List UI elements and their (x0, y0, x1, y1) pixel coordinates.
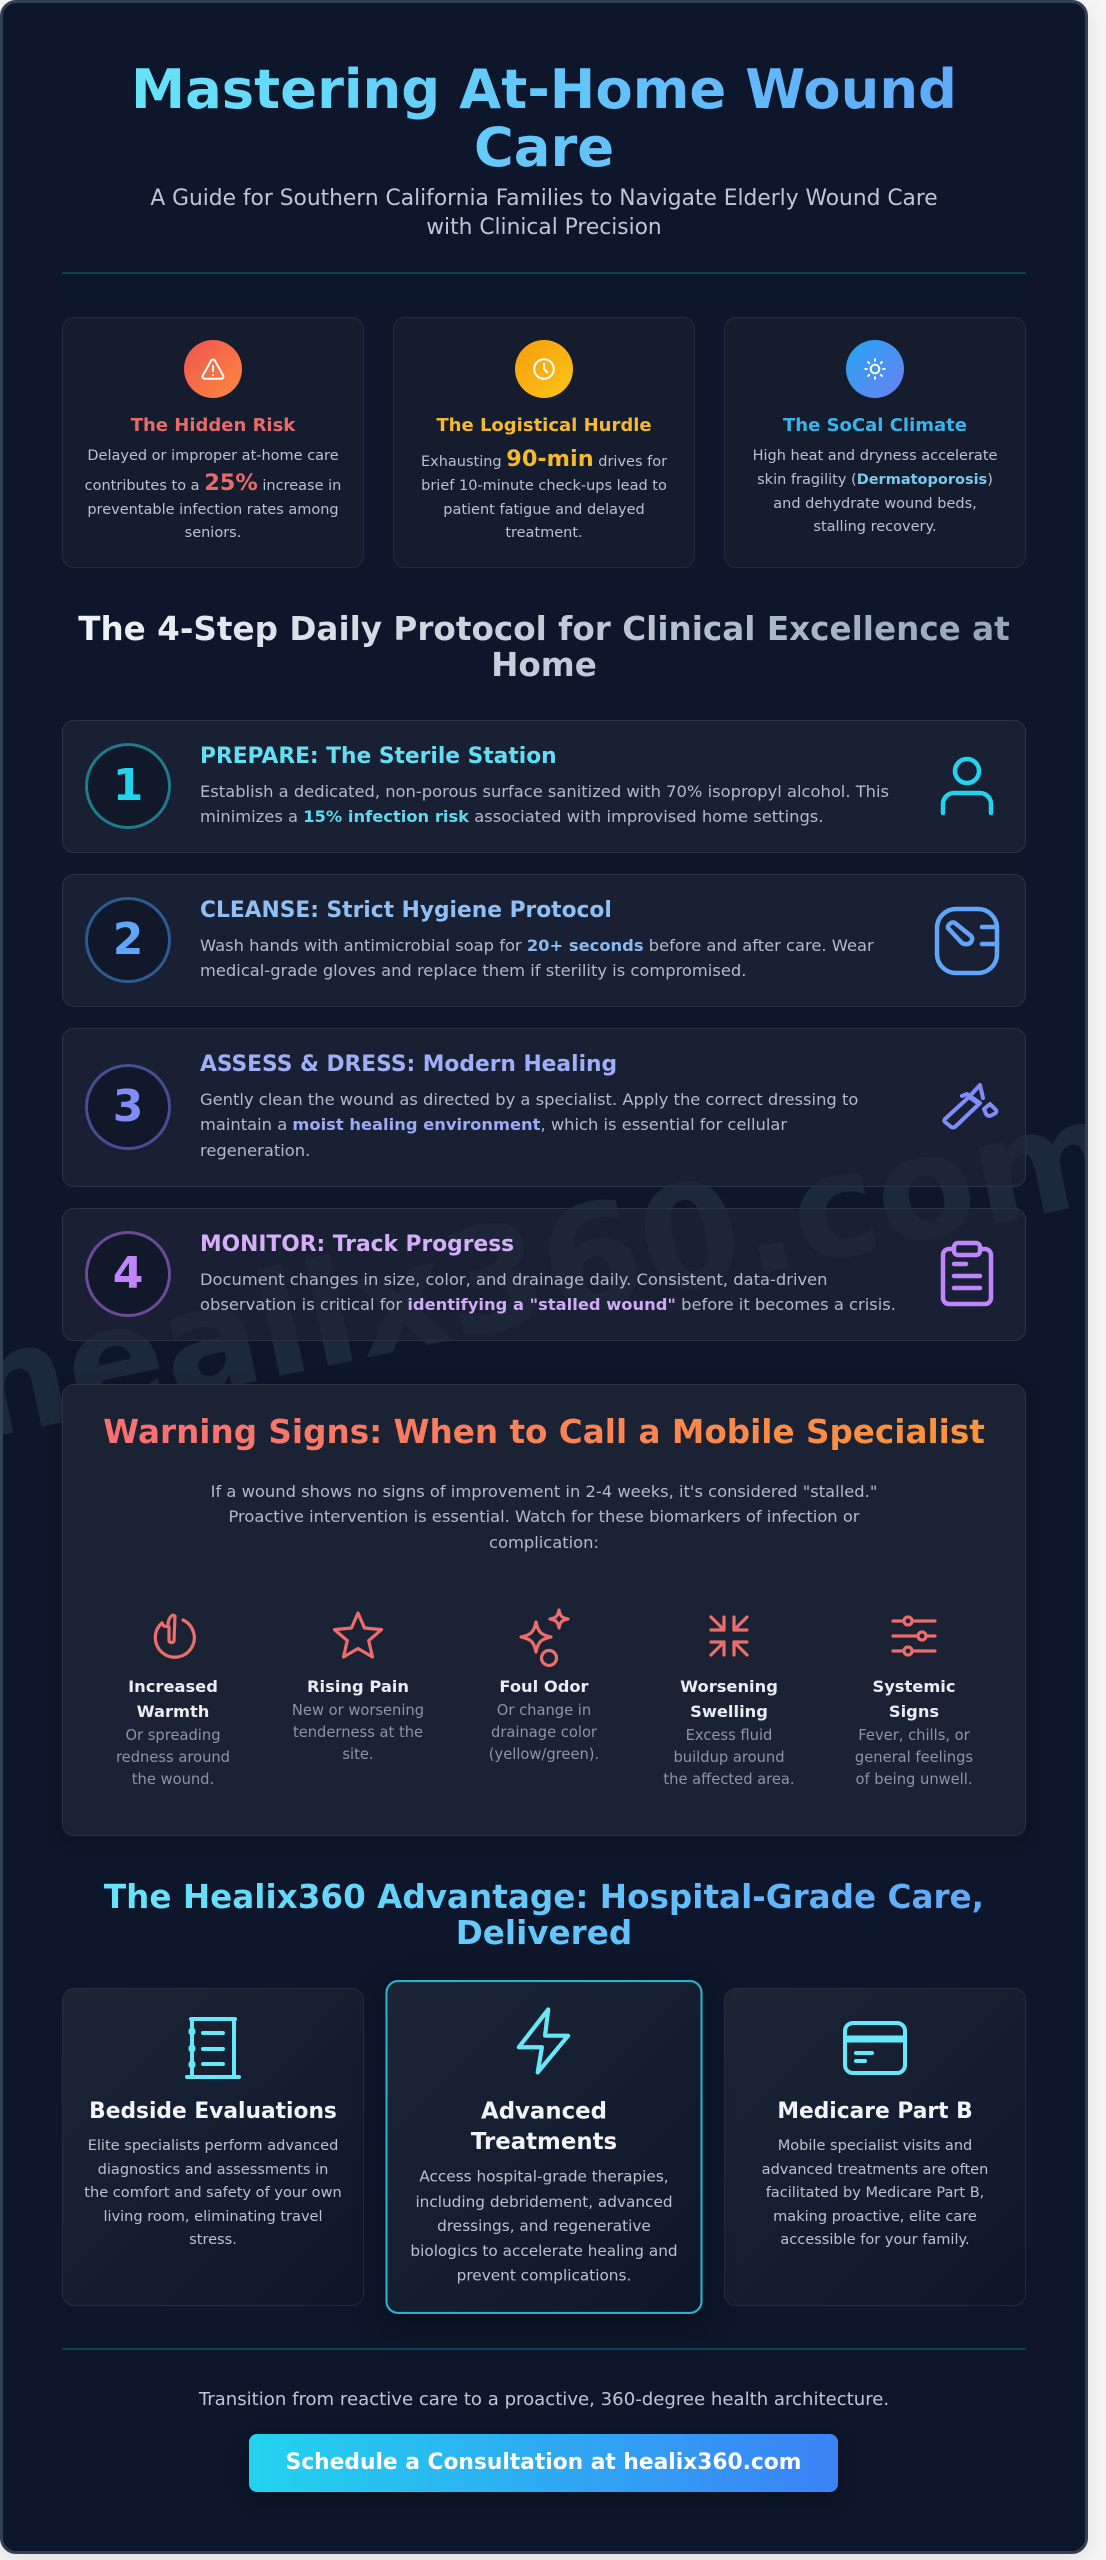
card text (84, 2137, 342, 2248)
subtitle: with Clinical Precision (426, 215, 662, 240)
panel: the hidden risk (62, 317, 364, 568)
icon: power flame (154, 1613, 196, 1659)
section heading: protocol (62, 611, 1026, 683)
card text: Elite specialists perform advanced (88, 2137, 338, 2154)
card text: living room, eliminating travel (103, 2208, 323, 2225)
step 3 text: Gently clean the wound as directed by a specialist. Apply the correct dressing to (200, 1090, 858, 1109)
sign description: Or spreading (125, 1727, 221, 1744)
footer divider (62, 2348, 1026, 2350)
step 1 text: Establish a dedicated, non-porous surface sanitized with 70% isopropyl alcohol. This (200, 782, 889, 801)
sign description (663, 1727, 795, 1788)
step 1 text: minimizes a 15% infection risk associated with improvised home settings. (200, 807, 824, 826)
sign title: Increased (128, 1677, 218, 1696)
card heading: Treatments (471, 2129, 617, 2155)
sign description: Or change in (497, 1702, 591, 1719)
step 3 number: 3 (113, 1081, 143, 1132)
sign description: New or worsening (292, 1702, 424, 1719)
panel: step 4 (62, 1208, 1026, 1341)
sign description: Fever, chills, or (858, 1727, 970, 1744)
step 2 number: 2 (113, 914, 143, 965)
title (62, 61, 1026, 176)
icon: sparkles (519, 1608, 570, 1668)
card text (725, 2134, 1025, 2252)
warning intro text: Proactive intervention is essential. Watch for these biomarkers of infection or (228, 1507, 860, 1526)
card text: biologics to accelerate healing and (410, 2242, 678, 2260)
sign description: the affected area. (663, 1771, 795, 1788)
card text: Exhausting 90-min drives for (421, 446, 667, 472)
sign description: general feelings (855, 1749, 973, 1766)
step 3 text: maintain a moist healing environment, which is essential for cellular (200, 1115, 787, 1134)
card heading: The Hidden Risk (131, 415, 295, 436)
sign: foul odor (489, 1608, 599, 1763)
sign description: the wound. (132, 1771, 214, 1788)
sign title: Foul Odor (499, 1677, 589, 1696)
warning intro text: complication: (489, 1533, 599, 1552)
warning intro text (211, 1482, 877, 1552)
step 2 text (200, 936, 874, 980)
card text: Mobile specialist visits and (778, 2137, 972, 2154)
step 4 text: observation is critical for identifying a "stalled wound" before it becomes a crisis. (200, 1295, 896, 1314)
step 1 text (200, 782, 889, 826)
icon: clock (515, 340, 573, 398)
sign description: site. (342, 1746, 374, 1763)
icon: clipboard (940, 1240, 994, 1306)
step 1 number: 1 (113, 760, 143, 811)
card heading: Medicare Part B (777, 2099, 973, 2124)
icon: sliders (891, 1615, 937, 1657)
step 1 heading: PREPARE: The Sterile Station (200, 744, 557, 769)
step 3 number (85, 1064, 171, 1150)
panel: advanced treatments (385, 1980, 703, 2314)
icon: person (940, 756, 994, 816)
title: Care (474, 116, 614, 178)
step 2 text: Wash hands with antimicrobial soap for 20+ seconds before and after care. Wear (200, 936, 874, 955)
card text: accessible for your family. (780, 2231, 970, 2248)
sign description (116, 1727, 230, 1788)
step 2 text: medical-grade gloves and replace them if sterility is compromised. (200, 961, 746, 980)
sign description (855, 1727, 973, 1788)
card heading: The Logistical Hurdle (436, 415, 652, 436)
icon: sun (846, 340, 904, 398)
card heading: Advanced (481, 2099, 607, 2125)
warning heading: Warning Signs: When to Call a Mobile Specialist (103, 1413, 985, 1451)
panel: medicare part b (724, 1988, 1026, 2306)
sign title (680, 1677, 778, 1721)
section heading: advantage: The Healix360 Advantage: Hospital-Grade Care, (104, 1878, 984, 1916)
icon: warning triangle (184, 340, 242, 398)
icon: document list (185, 2017, 241, 2079)
card text (410, 2168, 678, 2285)
sign: systemic signs (855, 1615, 973, 1788)
sign description: Excess fluid (686, 1727, 772, 1744)
step 4 number: 4 (113, 1248, 143, 1299)
warning intro text: If a wound shows no signs of improvement in 2-4 weeks, it's considered "stalled." (211, 1482, 877, 1501)
step 4 text (200, 1270, 896, 1314)
sign title (872, 1677, 956, 1721)
icon: star (332, 1611, 384, 1659)
card text: stress. (189, 2231, 237, 2248)
card text (753, 448, 997, 535)
sign title: Warmth (137, 1702, 209, 1721)
step 4 text: Document changes in size, color, and drainage daily. Consistent, data-driven (200, 1270, 828, 1289)
sign description: (yellow/green). (489, 1746, 599, 1763)
step 4 number (85, 1231, 171, 1317)
card text: including debridement, advanced (415, 2193, 673, 2211)
card text: facilitated by Medicare Part B, (766, 2184, 984, 2201)
icon: credit card (843, 2015, 907, 2079)
card text: prevent complications. (457, 2267, 631, 2285)
panel: warning signs (62, 1384, 1026, 1836)
step 2 heading: CLEANSE: Strict Hygiene Protocol (200, 898, 612, 923)
card text: treatment. (505, 525, 583, 541)
sign: increased warmth (116, 1613, 230, 1788)
sign title: Systemic (872, 1677, 956, 1696)
section heading: protocol: Home (491, 646, 597, 684)
card text: patient fatigue and delayed (443, 502, 645, 518)
icon: dressing tool (942, 1082, 998, 1130)
sign description: redness around (116, 1749, 230, 1766)
card text: dressings, and regenerative (437, 2218, 651, 2235)
card text: Delayed or improper at-home care (87, 448, 339, 464)
panel: step 1 (62, 720, 1026, 853)
sign title (128, 1677, 218, 1721)
section heading: advantage (62, 1879, 1026, 1951)
subtitle (150, 186, 938, 240)
card text: seniors. (185, 525, 241, 541)
step 3 heading: ASSESS & DRESS: Modern Healing (200, 1052, 617, 1077)
icon: lightning bolt (516, 2007, 570, 2074)
sign title: Signs (889, 1702, 939, 1721)
card text: diagnostics and assessments in (98, 2161, 328, 2178)
sign description: tenderness at the (293, 1724, 423, 1741)
call to action button (249, 2434, 838, 2492)
card heading: Bedside Evaluations (89, 2099, 337, 2124)
card text: making proactive, elite care (773, 2208, 977, 2225)
card text: advanced treatments are often (762, 2161, 988, 2178)
card text: contributes to a 25% increase in (85, 470, 341, 496)
card text: stalling recovery. (813, 519, 937, 535)
call to action button: Schedule a Consultation at healix360.com (286, 2450, 801, 2475)
card text: Access hospital-grade therapies, (419, 2168, 669, 2186)
card text: brief 10-minute check-ups lead to (421, 478, 667, 494)
header divider (62, 272, 1026, 274)
step 1 number (85, 743, 171, 829)
card text (85, 448, 341, 541)
step 2 number (85, 897, 171, 983)
card text (421, 446, 668, 541)
section heading: advantage: Delivered (456, 1914, 632, 1952)
sign description: of being unwell. (855, 1771, 973, 1788)
card text: skin fragility (Dermatoporosis) (757, 472, 993, 488)
step 4 heading: MONITOR: Track Progress (200, 1232, 514, 1257)
panel: step 3 (62, 1028, 1026, 1187)
title: Mastering At-Home Wound (131, 58, 957, 121)
sign: rising pain (292, 1611, 424, 1763)
section heading: protocol: The 4-Step Daily Protocol for Clinical Excellence at (78, 610, 1010, 648)
panel: the socal climate (724, 317, 1026, 568)
sign title: Swelling (690, 1702, 768, 1721)
sign title: Worsening (680, 1677, 778, 1696)
step 3 text (200, 1090, 858, 1160)
step 3 text: regeneration. (200, 1141, 310, 1160)
icon: soap dish (934, 906, 1000, 976)
subtitle: A Guide for Southern California Families to Navigate Elderly Wound Care (150, 186, 938, 211)
card text: High heat and dryness accelerate (753, 448, 997, 464)
sign description (489, 1702, 599, 1763)
card heading: The SoCal Climate (783, 415, 967, 436)
card text: and dehydrate wound beds, (773, 496, 977, 512)
panel: bedside evaluations (62, 1988, 364, 2306)
card heading (470, 2099, 617, 2155)
sign description (292, 1702, 424, 1763)
card text: preventable infection rates among (87, 502, 339, 518)
sign description: drainage color (491, 1724, 597, 1741)
panel: step 2 (62, 874, 1026, 1007)
panel: the logistical hurdle (393, 317, 695, 568)
sign title: Rising Pain (307, 1677, 409, 1696)
icon: arrows inward (709, 1615, 749, 1657)
closing text: Transition from reactive care to a proactive, 360-degree health architecture. (199, 2389, 889, 2410)
card text: the comfort and safety of your own (84, 2184, 342, 2201)
sign: worsening swelling (663, 1615, 795, 1788)
sign description: buildup around (673, 1749, 785, 1766)
